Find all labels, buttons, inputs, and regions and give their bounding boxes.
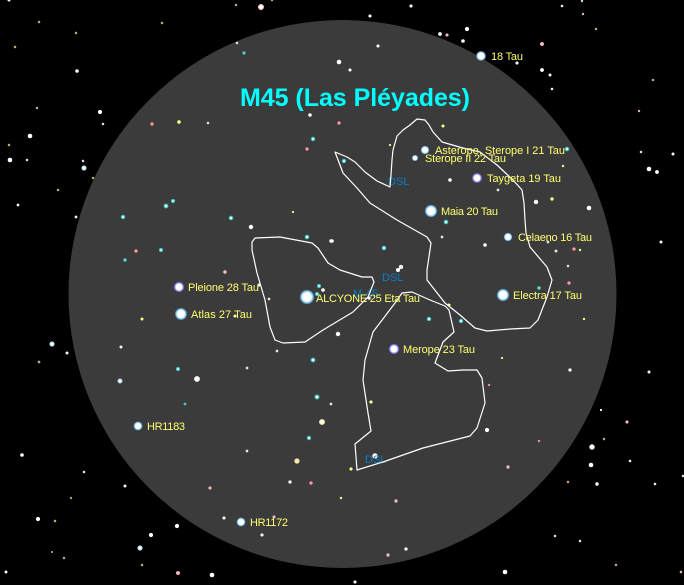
star: HR1183: HR1183 [147, 421, 185, 433]
star: Asterope: Asterope, Sterope I 21 Tau [435, 145, 565, 157]
star: Atlas: Atlas 27 Tau [191, 309, 252, 321]
star: Maia [425, 205, 498, 218]
nebula outline: left region [252, 237, 374, 343]
stars inside the field [118, 42, 591, 556]
star: Pleione: Pleione 28 Tau [188, 282, 259, 294]
deep sky labels: DSL [382, 272, 403, 284]
star: Alcyone [300, 290, 420, 305]
star: Maia: Maia 20 Tau [441, 206, 498, 218]
deep sky labels: DSL [388, 176, 409, 188]
deep sky labels [353, 176, 409, 466]
star: Electra: Electra 17 Tau [513, 290, 582, 302]
star: HR1172: HR1172 [250, 517, 288, 529]
deep sky labels: M 45 [353, 288, 378, 300]
star: 18 Tau [476, 51, 523, 63]
star: Sterope II: Sterope II 22 Tau [425, 153, 506, 165]
title: M45 (Las Pléyades) [240, 84, 470, 112]
nebula outline: lower region [355, 292, 485, 470]
circular field of view [68, 20, 616, 568]
deep sky labels: DSL [365, 454, 386, 466]
star: Merope: Merope 23 Tau [403, 344, 475, 356]
star: Taygeta: Taygeta 19 Tau [487, 173, 561, 185]
nebula outline: upper region [335, 119, 552, 331]
star: 18 Tau: 18 Tau [491, 51, 523, 63]
star: Celaeno: Celaeno 16 Tau [518, 232, 592, 244]
star: Alcyone: ALCYONE 25 Eta Tau [316, 293, 420, 305]
